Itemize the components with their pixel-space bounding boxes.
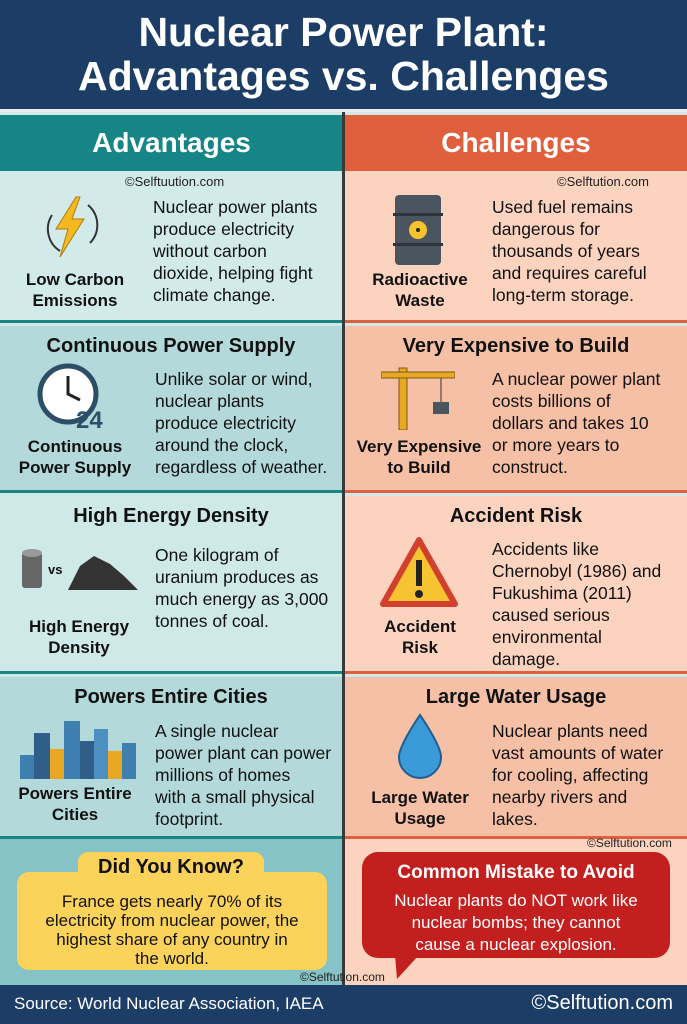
- panel: low carbon: climate change.: [153, 285, 276, 305]
- icon: water drop: [398, 713, 442, 779]
- panel: radioactive waste: dangerous for: [492, 219, 600, 239]
- panel: accident risk: Chernobyl (1986) and: [492, 561, 661, 581]
- callout: common mistake: Common Mistake to Avoid: [397, 862, 635, 883]
- panel: powers cities: millions of homes: [155, 765, 290, 785]
- text: ©Selftution.com: [300, 970, 385, 984]
- panel: continuous power: nuclear plants: [155, 391, 264, 411]
- panel: low carbon: without carbon: [153, 241, 267, 261]
- panel: energy density: [0, 496, 342, 674]
- panel: accident risk: caused serious: [492, 605, 610, 625]
- panel: powers cities: with a small physical: [155, 787, 314, 807]
- panel: water usage: nearby rivers and: [492, 787, 627, 807]
- panel: continuous power: Power Supply: [19, 458, 131, 477]
- footer: [0, 985, 687, 1024]
- icon: clock 24: [38, 364, 103, 432]
- panel: continuous power: [0, 326, 342, 493]
- panel: energy density: tonnes of coal.: [155, 611, 269, 631]
- panel: expensive: Very Expensive: [357, 437, 481, 456]
- header: advantages: Advantages: [92, 127, 251, 158]
- panel: accident risk: Accident Risk: [450, 505, 582, 527]
- callout: did you know: electricity from nuclear power, the: [45, 911, 299, 930]
- panel: expensive: or more years to: [492, 435, 619, 455]
- panel: radioactive waste: long-term storage.: [492, 285, 634, 305]
- icon: barrel: [393, 195, 443, 265]
- panel: expensive: to Build: [387, 458, 451, 477]
- panel: radioactive waste: Used fuel remains: [492, 197, 633, 217]
- panel: energy density: One kilogram of: [155, 545, 279, 565]
- panel: expensive: Very Expensive to Build: [403, 335, 629, 357]
- text: Did You Know?: [98, 856, 244, 878]
- panel: expensive: costs billions of: [492, 391, 611, 411]
- panel: expensive: [345, 326, 687, 493]
- panel: radioactive waste: thousands of years: [492, 241, 640, 261]
- panel: water usage: [345, 677, 687, 839]
- panel: expensive: dollars and takes 10: [492, 413, 649, 433]
- bottom left bg: [0, 839, 342, 985]
- callout: common mistake: Nuclear plants do NOT work like: [394, 891, 638, 910]
- panel: water usage: lakes.: [492, 809, 538, 829]
- title: [0, 0, 687, 112]
- panel: energy density: Density: [48, 638, 110, 657]
- panel: water usage: Nuclear plants need: [492, 721, 648, 741]
- callout: did you know: France gets nearly 70% of its: [62, 892, 282, 911]
- panel: expensive: A nuclear power plant: [492, 369, 660, 389]
- panel: powers cities: footprint.: [155, 809, 223, 829]
- panel: continuous power: around the clock,: [155, 435, 288, 455]
- panel: accident risk: damage.: [492, 649, 560, 669]
- panel: radioactive waste: ©Selftution.com: [557, 174, 649, 189]
- callout: common mistake: nuclear bombs; they cannot: [412, 913, 620, 932]
- panel: radioactive waste: Waste: [395, 291, 445, 310]
- callout: did you know: highest share of any country in: [56, 930, 288, 949]
- icon: city: [20, 721, 136, 779]
- header: advantages: [0, 115, 343, 171]
- panel: low carbon: dioxide, helping fight: [153, 263, 313, 283]
- panel: accident risk: Accident: [384, 617, 456, 636]
- panel: energy density: High Energy: [29, 617, 129, 636]
- panel: accident risk: environmental: [492, 627, 602, 647]
- title: Advantages vs. Challenges: [78, 53, 609, 99]
- panel: water usage: Usage: [394, 809, 446, 828]
- panel: powers cities: Powers Entire Cities: [74, 686, 268, 708]
- panel: expensive: construct.: [492, 457, 568, 477]
- panel: powers cities: Cities: [52, 805, 98, 824]
- panel: radioactive waste: [345, 171, 687, 323]
- panel: continuous power: produce electricity: [155, 413, 296, 433]
- callout: did you know: the world.: [135, 949, 209, 968]
- panel: low carbon: produce electricity: [153, 219, 294, 239]
- footer: ©Selftution.com: [532, 992, 673, 1014]
- callout: common mistake: cause a nuclear explosion.: [415, 935, 617, 954]
- panel: accident risk: Accidents like: [492, 539, 599, 559]
- divider: [342, 112, 345, 985]
- title: Nuclear Power Plant:: [138, 9, 549, 55]
- panel: accident risk: Risk: [402, 638, 438, 657]
- panel: water usage: for cooling, affecting: [492, 765, 648, 785]
- panel: energy density: High Energy Density: [73, 505, 269, 527]
- text: ©Selftution.com: [587, 836, 672, 850]
- panel: water usage: Large Water: [371, 788, 469, 807]
- header: challenges: Challenges: [441, 127, 591, 158]
- panel: accident risk: [345, 496, 687, 674]
- icon: warning: [380, 537, 458, 607]
- panel: continuous power: regardless of weather.: [155, 457, 327, 477]
- panel: powers cities: Powers Entire: [18, 784, 132, 803]
- panel: energy density: much energy as 3,000: [155, 589, 328, 609]
- panel: continuous power: Continuous: [28, 437, 122, 456]
- icon: lightning: [46, 196, 98, 258]
- panel: powers cities: power plant can power: [155, 743, 331, 763]
- footer: Source: World Nuclear Association, IAEA: [14, 994, 324, 1013]
- bottom right bg: [345, 839, 687, 985]
- panel: water usage: Large Water Usage: [426, 686, 606, 708]
- panel: radioactive waste: and requires careful: [492, 263, 647, 283]
- icon: uranium vs coal: [22, 549, 138, 590]
- panel: water usage: vast amounts of water: [492, 743, 663, 763]
- panel: low carbon: Nuclear power plants: [153, 197, 317, 217]
- panel: powers cities: [0, 677, 342, 839]
- panel: accident risk: Fukushima (2011): [492, 583, 632, 603]
- panel: powers cities: A single nuclear: [155, 721, 279, 741]
- panel: continuous power: Continuous Power Supply: [47, 335, 295, 357]
- icon: crane: [381, 368, 455, 430]
- panel: energy density: uranium produces as: [155, 567, 318, 587]
- callout: common mistake: [362, 852, 670, 958]
- panel: low carbon: Emissions: [32, 291, 118, 310]
- callout: did you know: [17, 872, 327, 970]
- panel: continuous power: Unlike solar or wind,: [155, 369, 313, 389]
- panel: low carbon: [0, 171, 342, 323]
- panel: radioactive waste: Radioactive: [372, 270, 468, 289]
- icon: uranium vs coal: vs: [48, 562, 62, 577]
- panel: low carbon: Low Carbon: [26, 270, 124, 289]
- header: challenges: [345, 115, 687, 171]
- panel: low carbon: ©Selftuution.com: [125, 174, 224, 189]
